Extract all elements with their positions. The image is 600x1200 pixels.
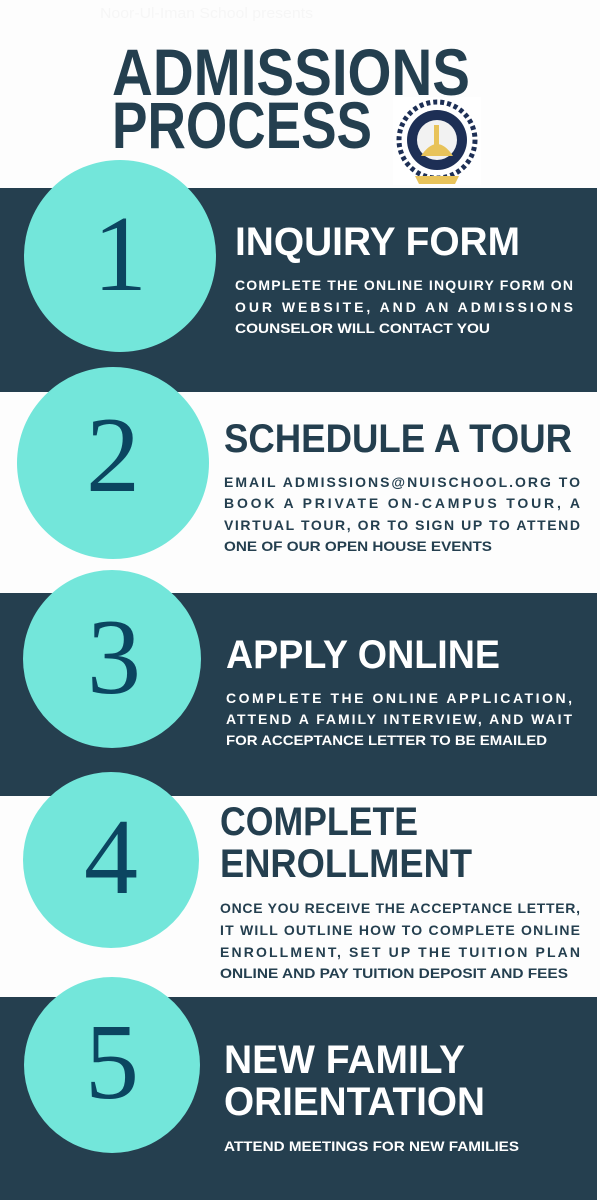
text: enrollment body: ENROLLMENT, SET UP THE TUITION PLAN [220,944,580,960]
circle 4 [23,772,199,948]
text: enrollment body: ONLINE AND PAY TUITION DEPOSIT AND FEES [220,965,568,981]
text: orientation body: ATTEND MEETINGS FOR NEW FAMILIES [224,1138,519,1154]
heading: complete enrollment: ENROLLMENT [220,842,472,886]
circle 2 [17,367,209,559]
step 4 [23,772,580,981]
faint header text: Noor-Ul-Iman School presents [100,5,313,22]
heading: apply online: APPLY ONLINE [226,633,500,677]
text: inquiry body: OUR WEBSITE, AND AN ADMISSIONS [235,299,573,315]
title: PROCESS [112,88,372,162]
text: enrollment body [220,900,580,981]
text: tour body [224,474,580,554]
icon: school logo [393,97,481,185]
text: apply body: COMPLETE THE ONLINE APPLICATION, [226,690,572,706]
step 1 [24,160,573,352]
title: ADMISSIONS [112,35,470,109]
step 2 [17,367,580,559]
text: apply body [226,690,572,748]
heading: new family orientation [224,1038,485,1124]
step 5 [24,977,519,1154]
circle 3 [23,570,201,748]
text: inquiry body: COUNSELOR WILL CONTACT YOU [235,320,490,336]
circle 1 [24,160,216,352]
bands [0,188,597,392]
number 2: 2 [86,396,140,515]
text: tour body: VIRTUAL TOUR, OR TO SIGN UP TO ATTEND [224,517,580,533]
text: inquiry body [235,277,573,336]
number 4: 4 [84,798,138,917]
text: inquiry body: COMPLETE THE ONLINE INQUIRY FORM ON [235,277,573,293]
heading: new family orientation: NEW FAMILY [224,1038,465,1082]
heading: schedule a tour: SCHEDULE A TOUR [224,417,572,461]
step 3 [23,570,572,748]
heading: complete enrollment: COMPLETE [220,800,418,844]
text: apply body: ATTEND A FAMILY INTERVIEW, AND WAIT [226,711,572,727]
title [112,35,470,162]
text: enrollment body: ONCE YOU RECEIVE THE ACCEPTANCE LETTER, [220,900,580,916]
text: tour body: ONE OF OUR OPEN HOUSE EVENTS [224,538,492,554]
text: apply body: FOR ACCEPTANCE LETTER TO BE EMAILED [226,732,547,748]
circle 5 [24,977,200,1153]
heading: new family orientation: ORIENTATION [224,1080,485,1124]
number 3: 3 [87,598,141,717]
text: enrollment body: IT WILL OUTLINE HOW TO COMPLETE ONLINE [220,922,580,938]
text: tour body: EMAIL ADMISSIONS@NUISCHOOL.ORG TO [224,474,580,490]
text: tour body: BOOK A PRIVATE ON-CAMPUS TOUR, A [224,495,580,511]
heading: complete enrollment [220,800,472,886]
heading: inquiry form: INQUIRY FORM [235,220,520,264]
number 1: 1 [93,195,147,314]
number 5: 5 [85,1003,139,1122]
